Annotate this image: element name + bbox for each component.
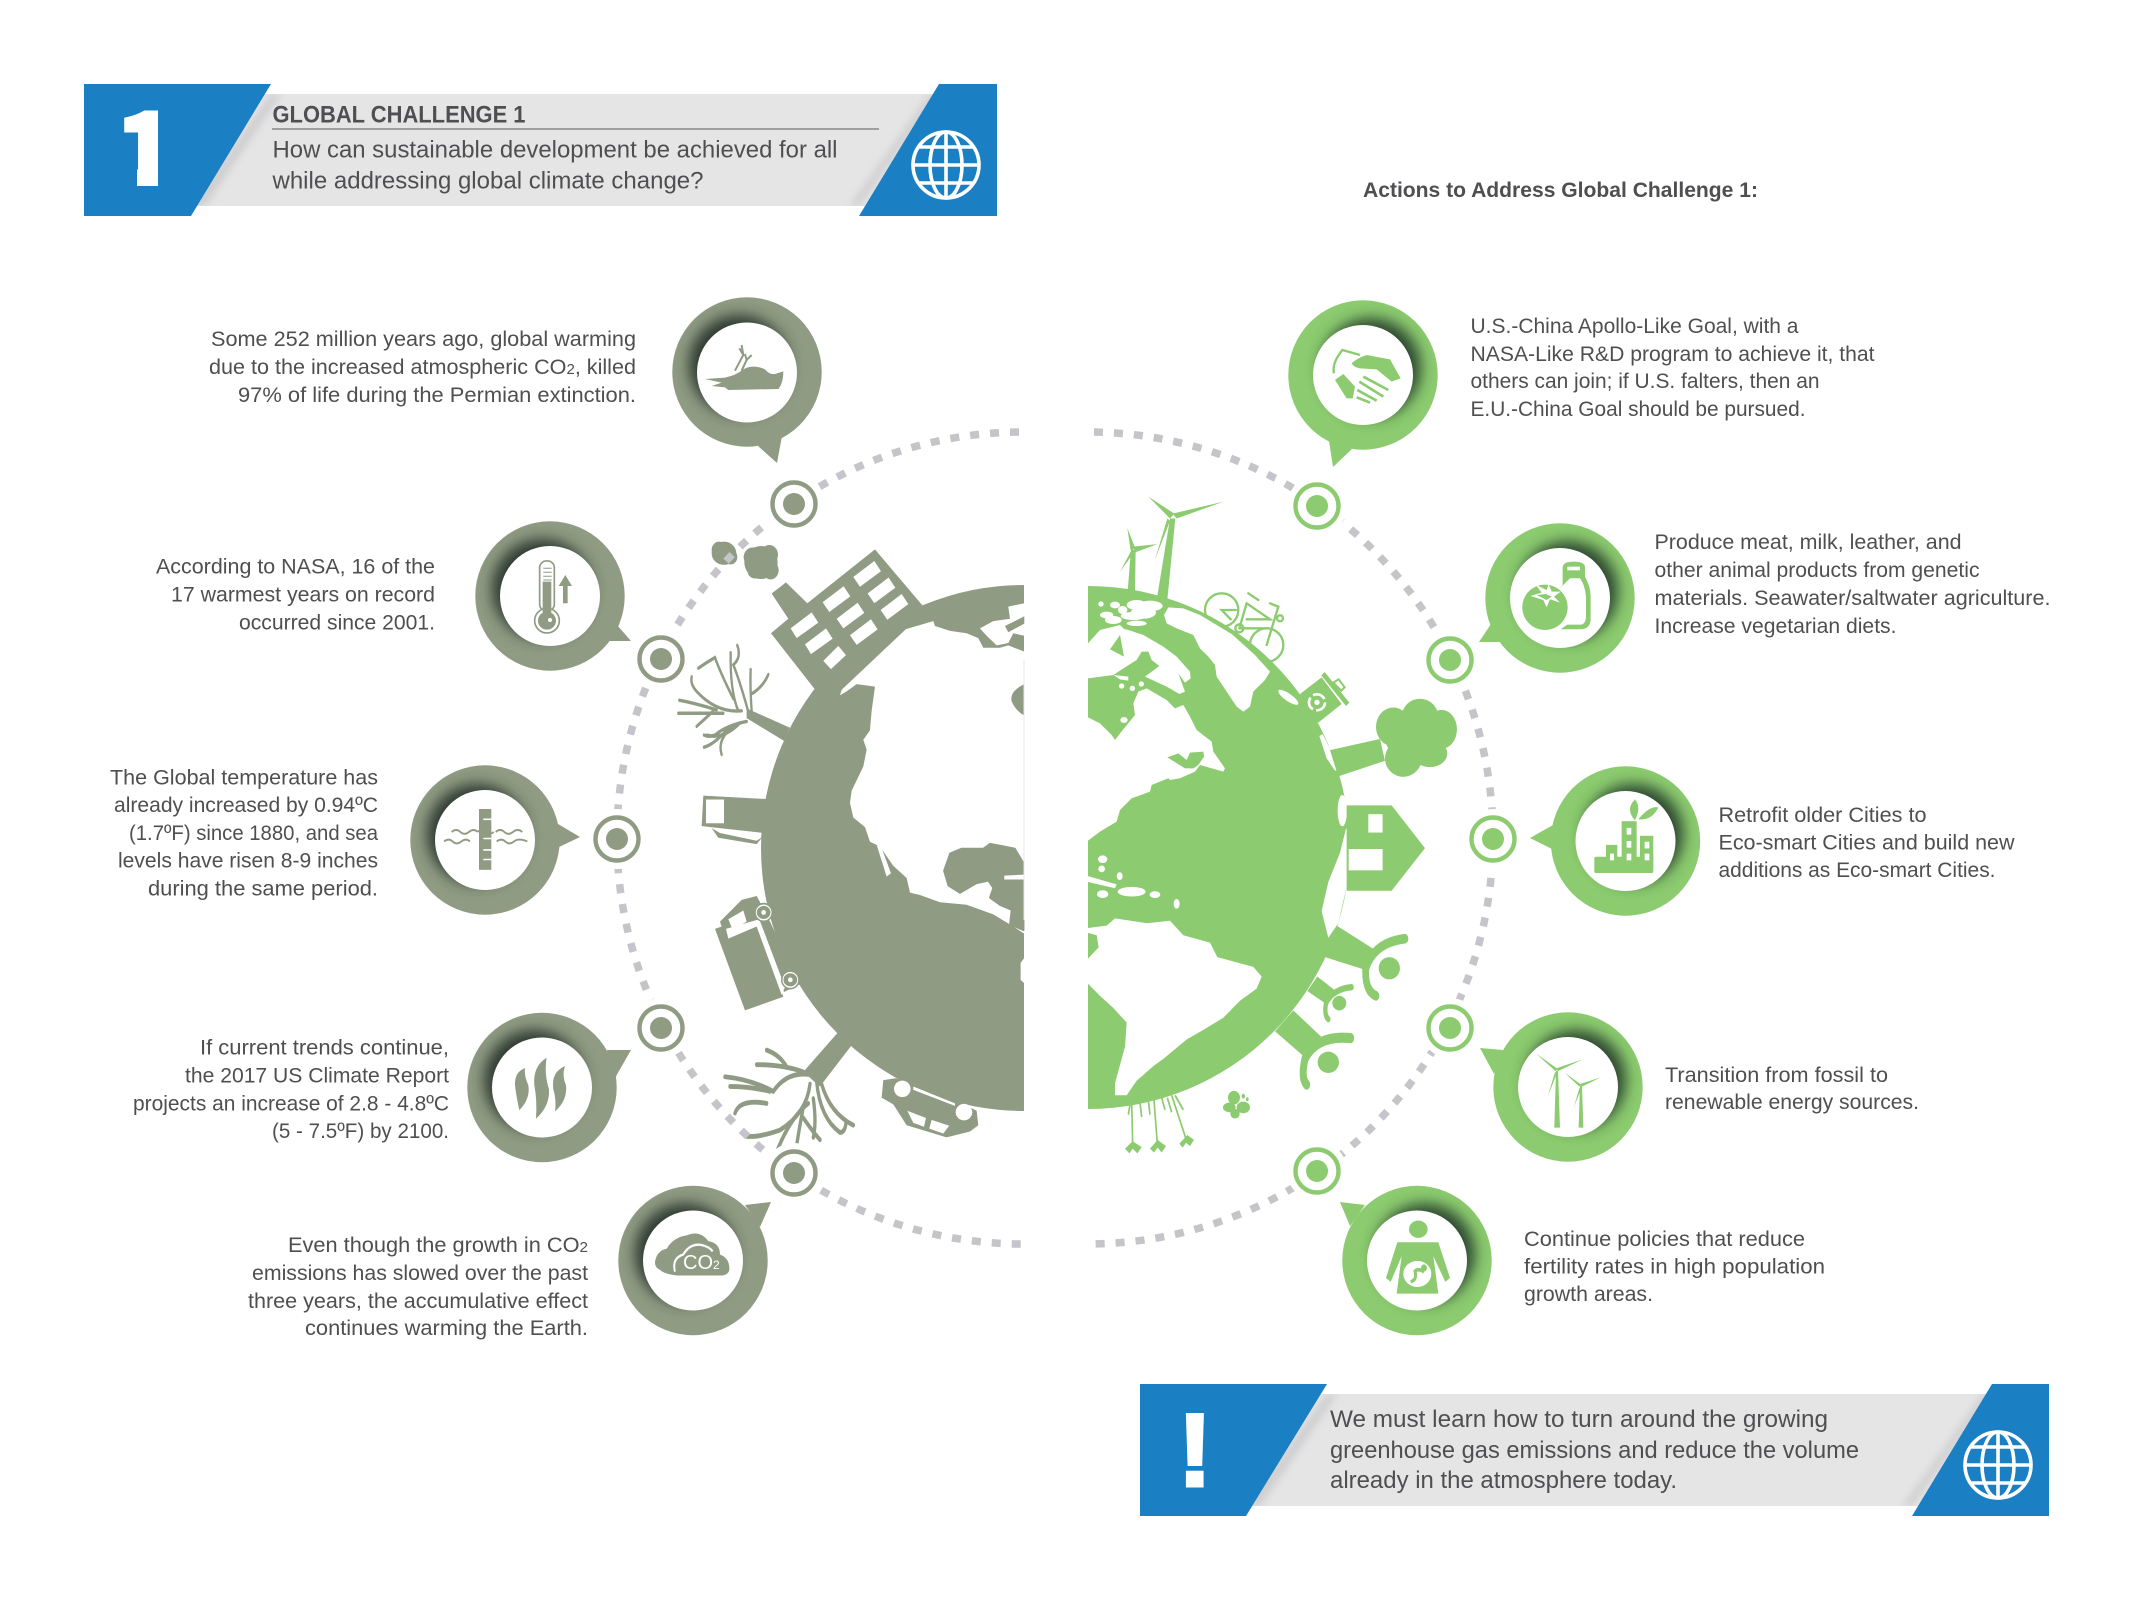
text: permian extinction: 97% of life during the Permian extinction. bbox=[238, 383, 636, 407]
text: climate report: If current trends continue, bbox=[200, 1036, 449, 1060]
icon: dead bird bbox=[705, 345, 783, 390]
text: CO2 emissions: continues warming the Earth. bbox=[305, 1316, 588, 1340]
white continent bbox=[840, 621, 1024, 934]
icon: heat waves bbox=[515, 1058, 566, 1119]
text: meat and milk: Increase vegetarian diets. bbox=[1654, 614, 1896, 638]
flowers and grass bbox=[1128, 1095, 1186, 1144]
text: meat and milk: Produce meat, milk, leather, and bbox=[1654, 530, 1962, 554]
nodes: right bbox=[1287, 476, 1523, 1201]
text: fertility: Continue policies that reduce bbox=[1524, 1227, 1805, 1251]
icon: pregnant woman bbox=[1386, 1221, 1450, 1294]
bubble: apollo-like goal bbox=[1288, 300, 1438, 467]
text: apollo-like goal bbox=[1470, 314, 1875, 421]
bubble: temperature and sea level bbox=[410, 765, 580, 915]
question text: while addressing global climate change? bbox=[272, 168, 704, 194]
text: warmest years: 17 warmest years on record bbox=[171, 582, 435, 606]
bubble: meat and milk bbox=[1479, 523, 1635, 673]
text: eco-smart cities: Retrofit older Cities to bbox=[1718, 803, 1927, 827]
factory bbox=[771, 549, 933, 691]
question text bbox=[272, 136, 838, 194]
message text: greenhouse gas emissions and reduce the volume bbox=[1330, 1437, 1859, 1464]
text: climate report bbox=[133, 1036, 449, 1143]
text: temperature and sea level: The Global temperature has bbox=[110, 766, 378, 790]
recycling bin bbox=[1300, 672, 1349, 723]
text: fertility: growth areas. bbox=[1524, 1282, 1653, 1306]
message text bbox=[1330, 1406, 1859, 1494]
bicycle bbox=[1205, 593, 1283, 662]
icon: eco city bbox=[1594, 799, 1658, 873]
text: permian extinction: Some 252 million years ago, global warming bbox=[211, 327, 636, 351]
message text: already in the atmosphere today. bbox=[1330, 1467, 1677, 1494]
text: climate report: projects an increase of 2.8 - 4.8ºC bbox=[133, 1092, 449, 1116]
icon: CO2 cloud bbox=[655, 1233, 729, 1276]
smoke bbox=[712, 542, 779, 579]
text: apollo-like goal: others can join; if U.S. falters, then an bbox=[1470, 369, 1820, 393]
badge number 1: 1 bbox=[116, 70, 178, 216]
text: temperature and sea level bbox=[110, 766, 378, 900]
text: eco-smart cities: Eco-smart Cities and build new bbox=[1718, 830, 2015, 854]
bubble: warmest years bbox=[475, 521, 631, 671]
dark landmasses bbox=[944, 844, 1024, 930]
bubble: renewable energy bbox=[1480, 1012, 1643, 1162]
icon: CO2 cloud: CO2 bbox=[683, 1252, 720, 1274]
text: fertility bbox=[1524, 1227, 1825, 1306]
truck bbox=[715, 896, 800, 1010]
icon: globe bbox=[913, 132, 979, 198]
text: eco-smart cities: additions as Eco-smart Cities. bbox=[1718, 858, 1996, 882]
text: temperature and sea level: already increased by 0.94ºC bbox=[114, 793, 378, 817]
northern continents bbox=[1088, 600, 1347, 841]
text: renewable energy: Transition from fossil to bbox=[1665, 1063, 1888, 1087]
text: temperature and sea level: during the same period. bbox=[148, 876, 378, 900]
text: apollo-like goal: NASA-Like R&D program to achieve it, that bbox=[1470, 342, 1875, 366]
text: renewable energy bbox=[1665, 1063, 1919, 1114]
icon: handshake bbox=[1334, 350, 1401, 403]
heading: global challenge 1: GLOBAL CHALLENGE 1 bbox=[272, 102, 526, 128]
globe: healthy right hemisphere bbox=[1088, 497, 1457, 1153]
southern continents and islands bbox=[1088, 829, 1350, 1095]
dashed ring: right bbox=[1094, 428, 1496, 1248]
text: CO2 emissions bbox=[248, 1233, 588, 1340]
text: temperature and sea level: levels have risen 8-9 inches bbox=[118, 848, 378, 872]
text: eco-smart cities bbox=[1718, 803, 2015, 882]
text: fertility: fertility rates in high population bbox=[1524, 1254, 1825, 1278]
people bbox=[1275, 926, 1405, 1085]
text: CO2 emissions: three years, the accumulative effect bbox=[248, 1289, 588, 1313]
text: warmest years bbox=[156, 554, 435, 634]
bubble: fertility bbox=[1340, 1186, 1492, 1335]
text: CO2 emissions: Even though the growth in CO2 bbox=[288, 1233, 588, 1257]
text: warmest years: According to NASA, 16 of the bbox=[156, 554, 435, 578]
icon: tomato and bottle bbox=[1522, 562, 1591, 630]
heading: actions: Actions to Address Global Challenge 1: bbox=[1363, 178, 1758, 202]
bubble: CO2 emissions bbox=[618, 1186, 771, 1335]
tree bbox=[1330, 699, 1457, 777]
text: meat and milk: materials. Seawater/saltwater agriculture. bbox=[1654, 586, 2050, 610]
globe: damaged left hemisphere bbox=[678, 542, 1024, 1159]
text: CO2 emissions: emissions has slowed over the past bbox=[252, 1261, 588, 1285]
dead tree bottom bbox=[725, 1033, 853, 1159]
bubble: eco-smart cities bbox=[1530, 766, 1700, 916]
icon: wind turbines bbox=[1536, 1053, 1601, 1128]
text: permian extinction: due to the increased atmospheric CO2, killed bbox=[209, 355, 636, 379]
icon: globe bbox=[1965, 1432, 2031, 1498]
text: climate report: (5 - 7.5ºF) by 2100. bbox=[272, 1119, 449, 1143]
text: apollo-like goal: U.S.-China Apollo-Like Goal, with a bbox=[1470, 314, 1799, 338]
fuel pump bbox=[702, 796, 767, 844]
text: meat and milk: other animal products from genetic bbox=[1654, 558, 1980, 582]
text: apollo-like goal: E.U.-China Goal should be pursued. bbox=[1470, 397, 1806, 421]
bubble: climate report bbox=[467, 1013, 631, 1162]
icon: sea level gauge bbox=[444, 809, 527, 870]
butterfly bbox=[1223, 1091, 1250, 1119]
nodes: left bbox=[587, 474, 824, 1203]
text: meat and milk bbox=[1654, 530, 2050, 638]
text: renewable energy: renewable energy sources. bbox=[1665, 1090, 1919, 1114]
text: temperature and sea level: (1.7ºF) since 1880, and sea bbox=[129, 821, 378, 845]
wind turbine large bbox=[1148, 497, 1224, 600]
banner: global challenge 1 bbox=[84, 70, 997, 216]
icon: thermometer bbox=[535, 561, 572, 633]
question text: How can sustainable development be achieved for all bbox=[272, 136, 838, 164]
dead tree top bbox=[678, 645, 790, 754]
dashed ring: left bbox=[614, 428, 1021, 1248]
bubble: permian extinction bbox=[672, 297, 822, 463]
wind turbine small bbox=[1120, 528, 1157, 592]
house bbox=[1347, 805, 1425, 891]
exclamation mark: ! bbox=[1178, 1393, 1212, 1509]
text: warmest years: occurred since 2001. bbox=[239, 610, 435, 634]
text: climate report: the 2017 US Climate Report bbox=[185, 1064, 449, 1088]
message text: We must learn how to turn around the growing bbox=[1330, 1406, 1828, 1433]
banner: call to action bbox=[1140, 1384, 2049, 1516]
car bbox=[882, 1078, 978, 1137]
text: permian extinction bbox=[209, 327, 636, 407]
